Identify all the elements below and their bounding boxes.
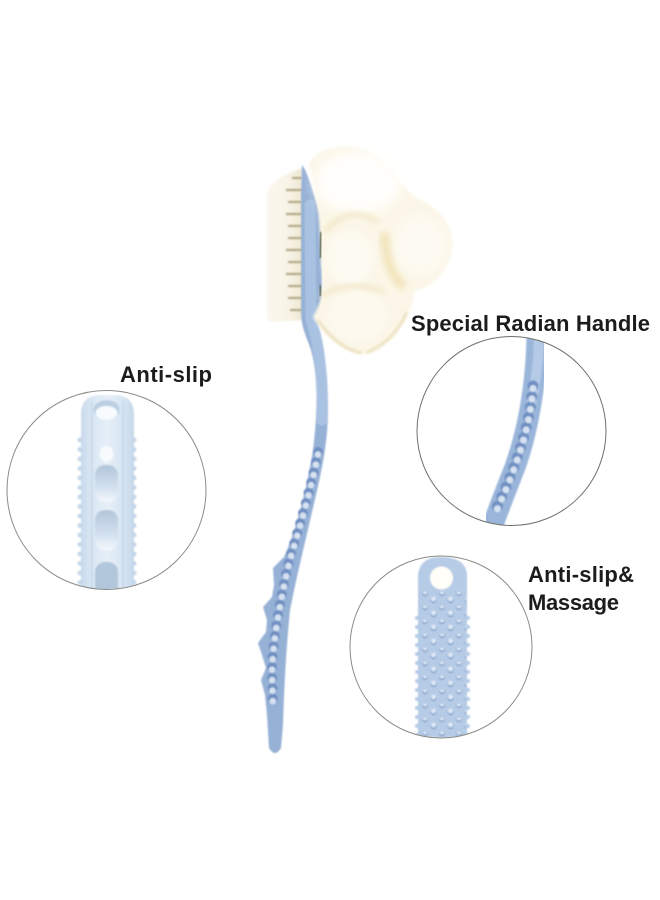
heading: Anti-slip& Massage: Massage (528, 590, 619, 615)
heading: Special Radian Handle: Special Radian Handle (411, 311, 650, 336)
heading: Anti-slip: Anti-slip (120, 362, 212, 387)
handle beads (272, 452, 318, 710)
handle beads (495, 386, 533, 514)
circle outline (350, 556, 532, 738)
dimples (95, 465, 118, 502)
circle outline (7, 390, 206, 590)
long handle (258, 165, 328, 753)
panel: Anti-slip and Massage detail (350, 556, 634, 745)
circle outline (417, 336, 606, 526)
loofah sponge (309, 147, 452, 354)
bristles (267, 168, 304, 322)
infographic: bath brush features (6, 146, 650, 754)
heading: Anti-slip& Massage: Anti-slip& (528, 562, 634, 587)
hole (93, 400, 120, 416)
panel: Special Radian Handle detail (411, 311, 650, 530)
product: brush with loofah (258, 147, 452, 753)
panel: Anti-slip detail (7, 362, 212, 600)
hole (430, 566, 453, 590)
